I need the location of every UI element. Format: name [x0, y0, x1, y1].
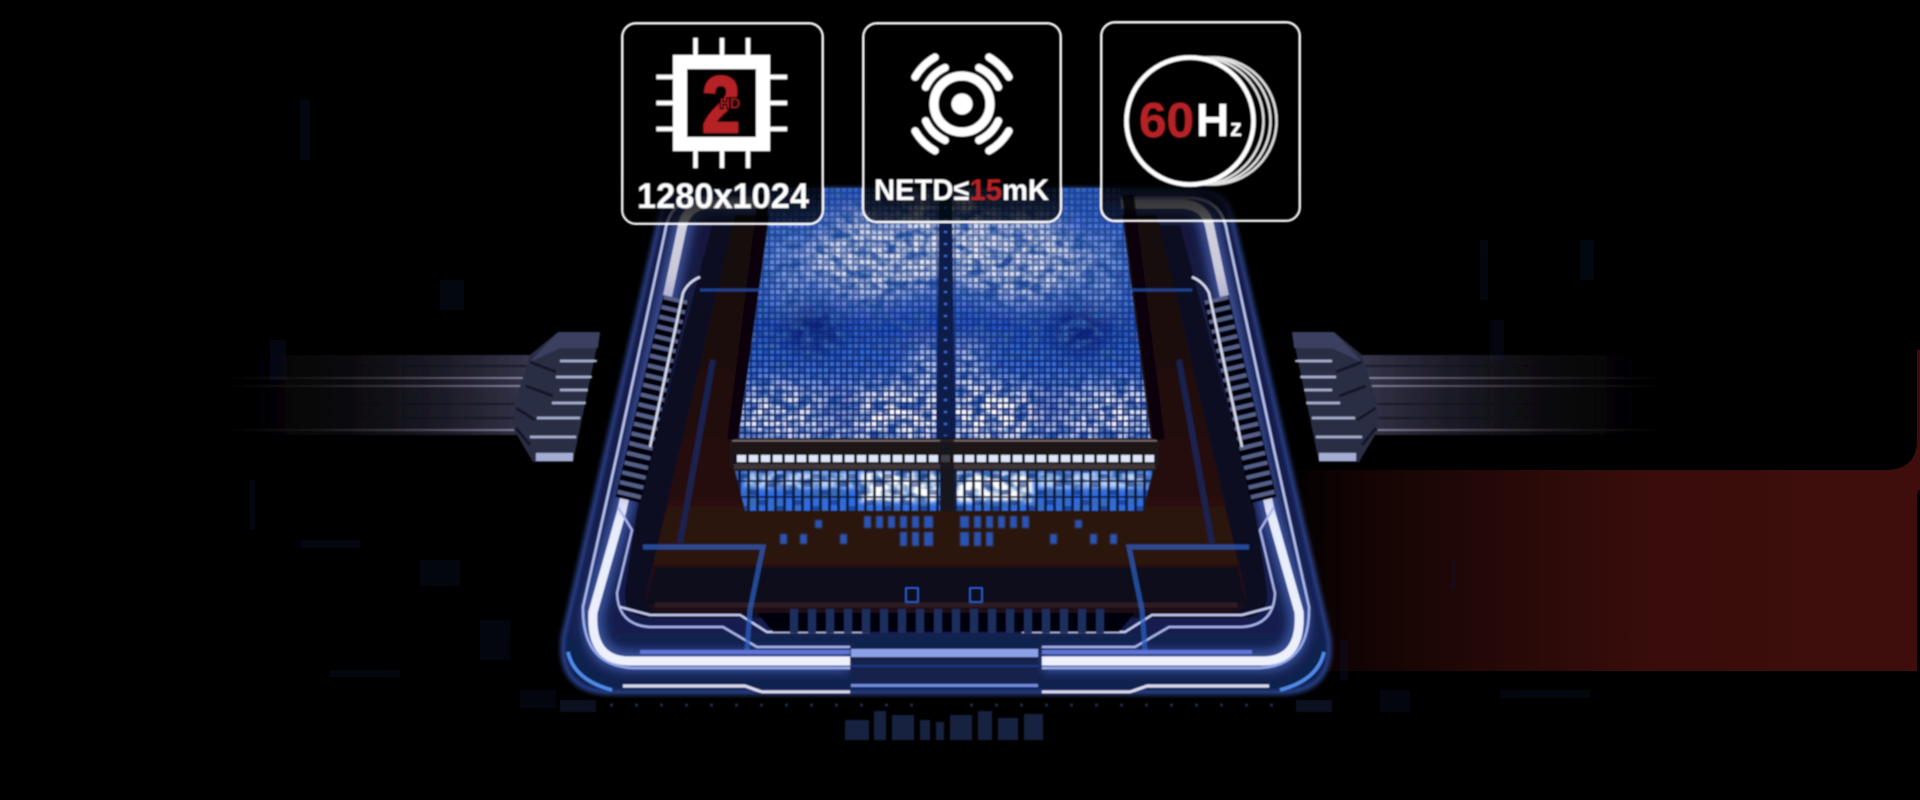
comb slot teeth: [790, 609, 1104, 633]
red edge sliver: [1885, 350, 1920, 470]
card frame: [1101, 22, 1300, 221]
frame glass body: [562, 190, 1330, 693]
60Hz label: z: [1230, 115, 1242, 142]
infographic canvas: [250, 20, 1920, 741]
bright white band: [593, 204, 1299, 661]
spec card: thermal sensitivity: [863, 23, 1061, 222]
right comb teeth: [1216, 298, 1264, 500]
central bottom tab: [851, 647, 1038, 687]
60Hz label: [1139, 94, 1242, 148]
faint vertical blue traces: [680, 360, 1212, 543]
upper lavender strip: [640, 650, 1252, 654]
LED sensor array: [622, 22, 1300, 546]
red background band: [1280, 470, 1920, 671]
lower white edge: [623, 686, 1269, 692]
array face: [730, 185, 1160, 445]
blue circuit traces: [643, 547, 1249, 650]
left comb strip: [628, 298, 676, 500]
faint circuit background: [250, 100, 1594, 712]
black edge sliver: [1917, 490, 1920, 671]
card frame: [863, 23, 1061, 222]
right comb strip: [1216, 298, 1264, 500]
package tray: [646, 567, 1246, 604]
package rim: [655, 602, 1237, 608]
outer rim glow: [562, 190, 1330, 693]
spec card: resolution: [622, 23, 823, 224]
band glow: [593, 204, 1299, 661]
NETD label: NETD≤15mK: [874, 174, 1049, 207]
front frame circle: [1126, 58, 1254, 184]
upper blue traces: [700, 288, 1192, 292]
card frame: [622, 23, 823, 224]
lower reflected array: [730, 471, 1160, 513]
right ribbon connector: [1292, 332, 1667, 462]
inner frame floor: [625, 225, 1267, 618]
icon: vibrating sensor: [915, 57, 1009, 151]
small blue squares: [906, 588, 982, 602]
notched ring line inner: [620, 607, 1272, 632]
bottom circuit blocks: [560, 700, 1332, 740]
icon: processor chip: [656, 38, 787, 168]
resolution label: 1280x1024: [637, 177, 810, 216]
faint array reflection: [780, 516, 1117, 546]
array centre divider: [937, 188, 955, 440]
notched ring line outer: [617, 507, 1275, 647]
icon: processor chip: 2: [702, 60, 740, 149]
60Hz label: H: [1196, 94, 1229, 146]
comb slot: [757, 613, 1135, 632]
icon: stacked frames: [1136, 58, 1276, 184]
60Hz label: 60: [1139, 94, 1194, 148]
left comb teeth: [628, 298, 676, 500]
thin outer light line: [583, 198, 1309, 668]
sensor module frame: [562, 190, 1330, 693]
glass slab: [730, 438, 1159, 471]
black gaps beside array: [733, 195, 1159, 440]
lower blue corner highlight: [568, 652, 1324, 690]
divider dots: [944, 195, 947, 436]
left ribbon connector: [225, 332, 600, 462]
icon: processor chip: HD: [720, 95, 740, 111]
left comb inner line: [650, 277, 700, 447]
spec card: frame rate: [1101, 22, 1300, 221]
sensor package: [646, 215, 1246, 613]
right comb inner line: [1192, 277, 1242, 447]
